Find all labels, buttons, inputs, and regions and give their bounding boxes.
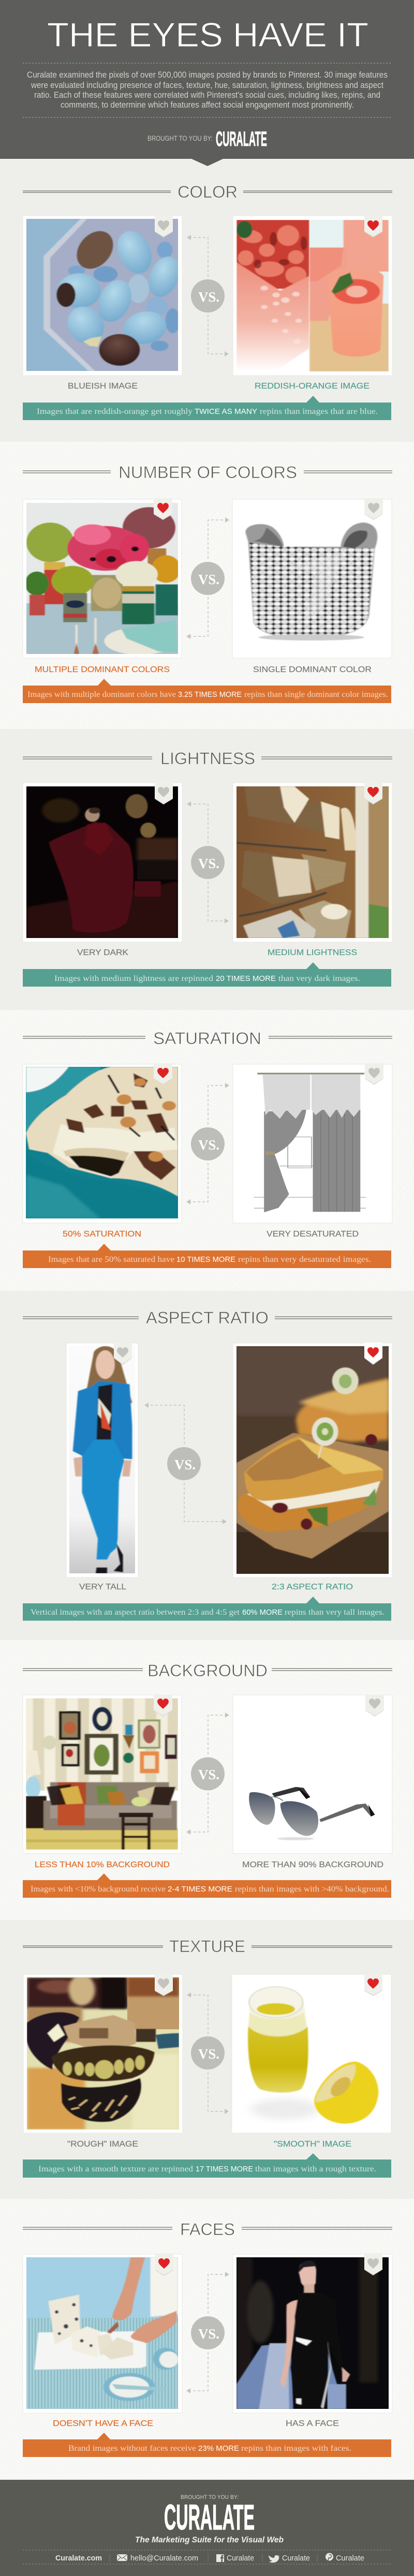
icon: red heart bookmark [154, 1063, 172, 1085]
label: reddish-orange image: REDDISH-ORANGE IMAGE [255, 382, 369, 391]
card: has a face [233, 2254, 392, 2413]
callout: twice as many: TWICE AS MANY [195, 407, 257, 416]
label: rough image: "ROUGH" IMAGE [67, 2140, 138, 2149]
connector arrows [187, 1992, 229, 2114]
vs badge: VS. [198, 1137, 219, 1153]
icon: grey heart bookmark [155, 1974, 173, 1996]
icon: grey heart bookmark [365, 1063, 383, 1085]
callout: 60% more [23, 1597, 391, 1620]
card: very desaturated [233, 1064, 392, 1223]
intro text [27, 70, 388, 110]
title: THE EYES HAVE IT [47, 16, 368, 54]
label: less than 10% background: LESS THAN 10% BACKGROUND [35, 1860, 170, 1869]
heading: faces [23, 2220, 392, 2239]
intro text: Curalate examined the pixels of over 500,000 images posted by brands to Pinterest. 30 image features [27, 70, 388, 80]
vs badge: VS. [198, 1767, 219, 1782]
card: very tall [66, 1343, 138, 1577]
label: very tall: VERY TALL [79, 1583, 126, 1591]
card: 2:3 aspect ratio [233, 1343, 392, 1577]
panel: texture [23, 1937, 392, 2178]
intro text: comments, to determine which features affect social engagement most prominently. [61, 100, 354, 110]
card: reddish-orange image [233, 216, 392, 376]
callout: 3.25 times more: Images with multiple dominant colors have [27, 690, 176, 699]
vs badge [191, 846, 225, 879]
callout: 10 times more: Images that are 50% saturated have [48, 1255, 174, 1264]
connector arrows [186, 2272, 229, 2393]
label: doesn't have a face: DOESN'T HAVE A FACE [53, 2419, 153, 2428]
card: medium lightness [233, 783, 392, 942]
heading: color [23, 183, 392, 201]
icon: envelope [117, 2554, 127, 2561]
panel: number of colors [0, 442, 414, 729]
callout: 2-4 times more [23, 1873, 391, 1898]
vs badge: VS. [198, 2046, 219, 2062]
card: smooth image [232, 1974, 391, 2133]
heading: color: COLOR [178, 183, 238, 201]
label: single dominant color: SINGLE DOMINANT COLOR [253, 665, 372, 674]
header panel [0, 0, 414, 166]
callout: 3.25 times more [23, 679, 391, 703]
card: blueish image [23, 216, 184, 376]
footer panel [0, 2480, 414, 2576]
contact row: Curalate [227, 2554, 254, 2563]
icon: red heart bookmark [154, 498, 172, 520]
contact row: Curalate [336, 2554, 364, 2563]
intro text: ratio. Each of these features were correlated with Pinterest's social cues, including likes, repins, and [34, 91, 380, 100]
heading: saturation: SATURATION [153, 1029, 261, 1048]
heading: number of colors [23, 463, 392, 482]
card: 50% saturation [23, 1064, 182, 1223]
callout: 20 times more: 20 TIMES MORE [216, 974, 276, 983]
icon: grey heart bookmark [155, 782, 173, 805]
panel: aspect ratio [23, 1308, 392, 1620]
contact row: Curalate [282, 2554, 310, 2563]
icon: red heart bookmark [364, 782, 382, 805]
card: single dominant color [232, 499, 392, 658]
callout: 23% more: Brand images without faces receive [68, 2444, 196, 2453]
tagline: The Marketing Suite for the Visual Web [135, 2536, 284, 2544]
icon: grey heart bookmark [365, 1694, 384, 1717]
icon: red heart bookmark [364, 1343, 382, 1365]
callout: 60% more: repins than very tall images. [285, 1608, 385, 1617]
heading: aspect ratio [23, 1308, 392, 1327]
contact row: hello@Curalate.com [130, 2554, 198, 2563]
icon: twitter [269, 2555, 279, 2563]
panel: background [0, 1640, 414, 1920]
panel: saturation [0, 1010, 414, 1291]
label: 2:3 aspect ratio: 2:3 ASPECT RATIO [272, 1583, 353, 1591]
vs badge: VS. [198, 572, 219, 587]
callout: 10 times more: 10 TIMES MORE [176, 1255, 235, 1264]
connector arrows [186, 517, 229, 639]
connector arrows [186, 1083, 229, 1204]
callout: 17 times more [23, 2153, 391, 2178]
icon: grey heart bookmark [114, 1343, 132, 1365]
vs badge [191, 2316, 225, 2349]
callout: 17 times more: Images with a smooth texture are repinned [38, 2165, 193, 2173]
icon: grey heart bookmark [155, 215, 173, 237]
callout: 20 times more: Images with medium lightness are repinned [54, 974, 213, 983]
callout: twice as many: Images that are reddish-orange get roughly [37, 407, 193, 416]
card: less than 10% background [23, 1695, 182, 1853]
callout: 20 times more: than very dark images. [278, 974, 360, 983]
label: medium lightness: MEDIUM LIGHTNESS [268, 948, 357, 957]
heading: number of colors: NUMBER OF COLORS [119, 463, 297, 482]
label: very desaturated: VERY DESATURATED [267, 1230, 359, 1239]
callout: 3.25 times more: 3.25 TIMES MORE [178, 690, 242, 699]
callout: 20 times more [23, 962, 391, 987]
footer brought to you by: BROUGHT TO YOU BY: [181, 2494, 239, 2500]
vs badge: VS. [198, 289, 219, 305]
callout: 60% more: Vertical images with an aspect ratio between 2:3 and 4:5 get [31, 1608, 240, 1617]
callout: 10 times more: repins than very desaturated images. [238, 1255, 371, 1264]
callout: 23% more: 23% MORE [198, 2444, 239, 2453]
heading: texture: TEXTURE [169, 1937, 245, 1956]
label: more than 90% background: MORE THAN 90% BACKGROUND [242, 1860, 383, 1869]
vs badge: VS. [198, 856, 219, 871]
callout: 60% more: 60% MORE [242, 1608, 283, 1617]
callout: 17 times more: 17 TIMES MORE [196, 2165, 253, 2173]
heading: background: BACKGROUND [147, 1661, 268, 1680]
vs badge: VS. [174, 1457, 196, 1472]
panel: lightness [23, 749, 392, 987]
callout: twice as many [23, 396, 391, 420]
vs badge [191, 1757, 225, 1790]
heading: lightness: LIGHTNESS [160, 749, 255, 768]
icon: facebook [216, 2554, 224, 2562]
panel: color [23, 183, 392, 420]
callout: 23% more: repins than images with faces. [241, 2444, 351, 2453]
callout: 17 times more: than images with a rough texture. [255, 2165, 376, 2173]
heading: lightness [23, 749, 392, 768]
icon: red heart bookmark [364, 1974, 382, 1996]
vs badge [191, 1127, 225, 1160]
intro text: were evaluated including presence of faces, texture, hue, saturation, lightness, brightness and aspect [31, 81, 383, 90]
contact row [55, 2553, 364, 2563]
label: has a face: HAS A FACE [286, 2419, 339, 2428]
connector arrows [187, 235, 229, 356]
footer panel: CURALATE [164, 2497, 255, 2537]
callout: 2-4 times more: Images with <10% background receive [31, 1885, 166, 1894]
card: rough image [23, 1974, 183, 2133]
icon: red heart bookmark [155, 2253, 173, 2276]
heading: saturation [23, 1029, 392, 1048]
callout: 3.25 times more: repins than single dominant color images. [244, 690, 388, 699]
heading: background [23, 1661, 392, 1680]
icon: grey heart bookmark [364, 498, 383, 520]
label: multiple dominant colors: MULTIPLE DOMINANT COLORS [35, 665, 170, 674]
vs badge [167, 1447, 201, 1480]
label: very dark: VERY DARK [77, 948, 128, 957]
callout: 23% more [23, 2433, 391, 2457]
callout: 10 times more [23, 1244, 391, 1268]
connector arrows [144, 1403, 227, 1524]
icon: red heart bookmark [364, 215, 382, 237]
card: doesn't have a face [23, 2254, 182, 2413]
label: 50% saturation: 50% SATURATION [63, 1230, 141, 1239]
label: smooth image: "SMOOTH" IMAGE [274, 2140, 351, 2149]
icon: pinterest [326, 2553, 333, 2561]
callout: 2-4 times more: 2-4 TIMES MORE [168, 1885, 232, 1894]
heading: aspect ratio: ASPECT RATIO [146, 1308, 269, 1327]
vs badge [191, 2036, 225, 2069]
brought to you by: BROUGHT TO YOU BY: [147, 134, 213, 142]
icon: grey heart bookmark [364, 2253, 382, 2275]
callout: twice as many: repins than images that are blue. [260, 407, 378, 416]
card: multiple dominant colors [23, 499, 182, 658]
callout: 2-4 times more: repins than images with >40% background. [235, 1885, 389, 1894]
vs badge [191, 562, 225, 595]
card: very dark [23, 783, 182, 942]
connector arrows [186, 1713, 229, 1835]
heading: texture [23, 1937, 392, 1956]
panel: faces [0, 2199, 414, 2480]
heading: faces: FACES [180, 2220, 235, 2239]
header panel: CURALATE [216, 128, 267, 151]
icon: red heart bookmark [154, 1694, 172, 1717]
connector arrows [187, 801, 229, 924]
card: more than 90% background [233, 1695, 392, 1853]
vs badge: VS. [198, 2326, 219, 2342]
contact row: Curalate.com [55, 2554, 102, 2563]
vs badge [191, 279, 225, 312]
label: blueish image: BLUEISH IMAGE [68, 382, 138, 391]
brought to you by [147, 128, 267, 151]
